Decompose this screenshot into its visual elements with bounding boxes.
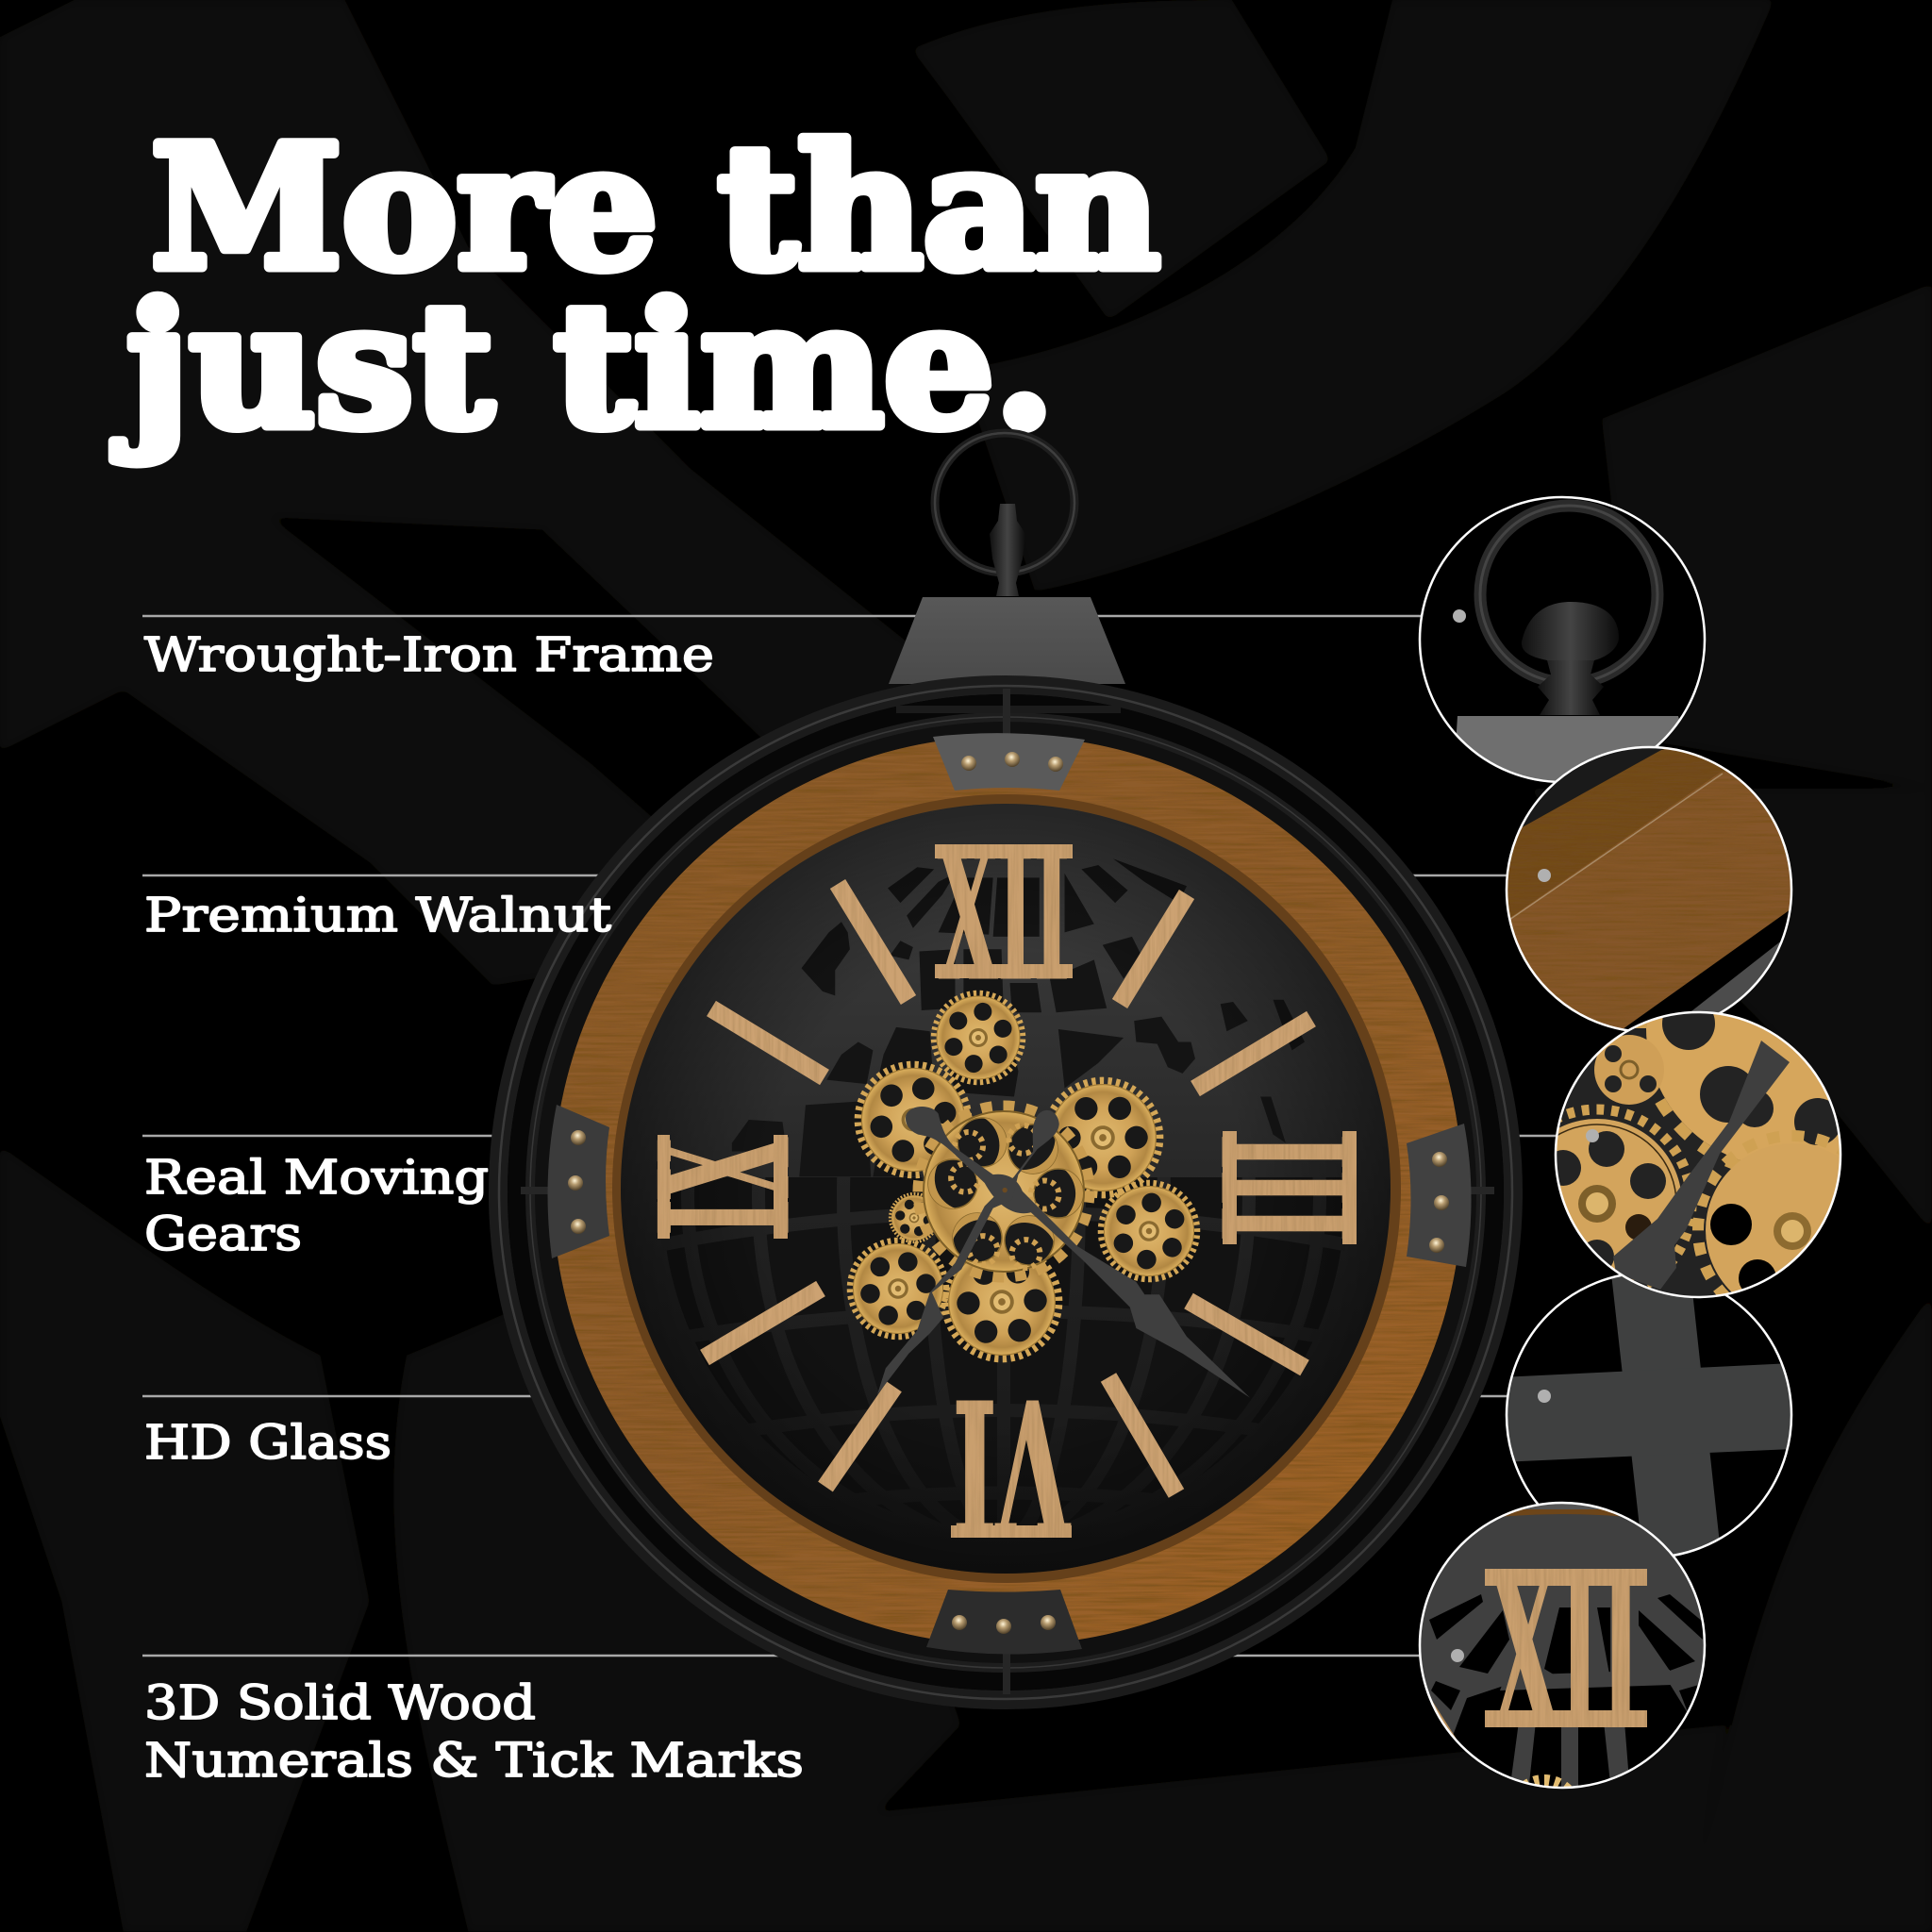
globe: lower hemisphere grid: [667, 1177, 1342, 1458]
roman numerals: VI: [953, 1358, 1071, 1574]
detail circle: iron ring and knob: [1419, 496, 1706, 792]
outer frame rings: [498, 685, 1513, 1700]
clock: [498, 433, 1513, 1700]
walnut ring: [553, 736, 1462, 1645]
detail circle: walnut wood: [1500, 717, 1802, 1038]
hub pin: [1002, 1188, 1008, 1192]
metal plates with rivets: [548, 733, 1472, 1655]
wood bevel: [612, 794, 1401, 1583]
big gear piece: [1635, 1021, 1741, 1169]
label: wrought-iron frame: Wrought-Iron Frame: [144, 627, 714, 682]
left gear piece: [1558, 1104, 1696, 1288]
small gear piece: [1594, 1035, 1664, 1105]
label: real moving gears: Real Moving: [144, 1150, 489, 1205]
globe: upper hemisphere cut-outs and continents: [732, 858, 1305, 1176]
roman numerals: [622, 809, 1391, 1574]
label: real moving gears: Gears: [144, 1207, 302, 1261]
callout leader lines: [142, 616, 1592, 1656]
hanging ring: [935, 433, 1074, 573]
title: just time.: [113, 267, 1055, 466]
roman numerals: IX: [622, 1138, 828, 1236]
roman numerals: XII: [938, 809, 1070, 1020]
roman numerals: III: [1181, 1134, 1391, 1241]
hour hand: [877, 1110, 1059, 1395]
detail circle: glass reflection cross: [1500, 1272, 1792, 1561]
detail circle: wooden numeral XII: [1419, 1502, 1706, 1789]
label: hd glass: HD Glass: [144, 1415, 391, 1470]
detail circle: wooden numeral XII: XII: [1491, 1527, 1641, 1775]
label: 3d solid wood numerals and tick marks: [144, 1675, 804, 1788]
bracket: [889, 597, 1125, 684]
title: More than: [151, 108, 1160, 308]
title: [113, 108, 1160, 466]
tick marks: [705, 884, 1311, 1493]
minute hand: [906, 1107, 1250, 1398]
label: premium walnut: Premium Walnut: [144, 888, 611, 942]
label: 3d solid wood numerals and tick marks: 3D Solid Wood: [144, 1675, 536, 1730]
top and bottom clips: [521, 689, 1494, 1694]
finial: [990, 504, 1025, 596]
label: real moving gears: [144, 1150, 489, 1261]
dial: [621, 804, 1391, 1574]
gears: [838, 987, 1200, 1377]
detail circle: gears: [1555, 1011, 1841, 1298]
dial vignette: [621, 804, 1391, 1574]
clock hands: [877, 1107, 1250, 1398]
callout dots: [1451, 609, 1599, 1662]
label: 3d solid wood numerals and tick marks: Numerals & Tick Marks: [144, 1733, 804, 1788]
hand: [1613, 1041, 1790, 1290]
main gear: [919, 1107, 1089, 1276]
lower right gear piece: [1692, 1130, 1841, 1297]
